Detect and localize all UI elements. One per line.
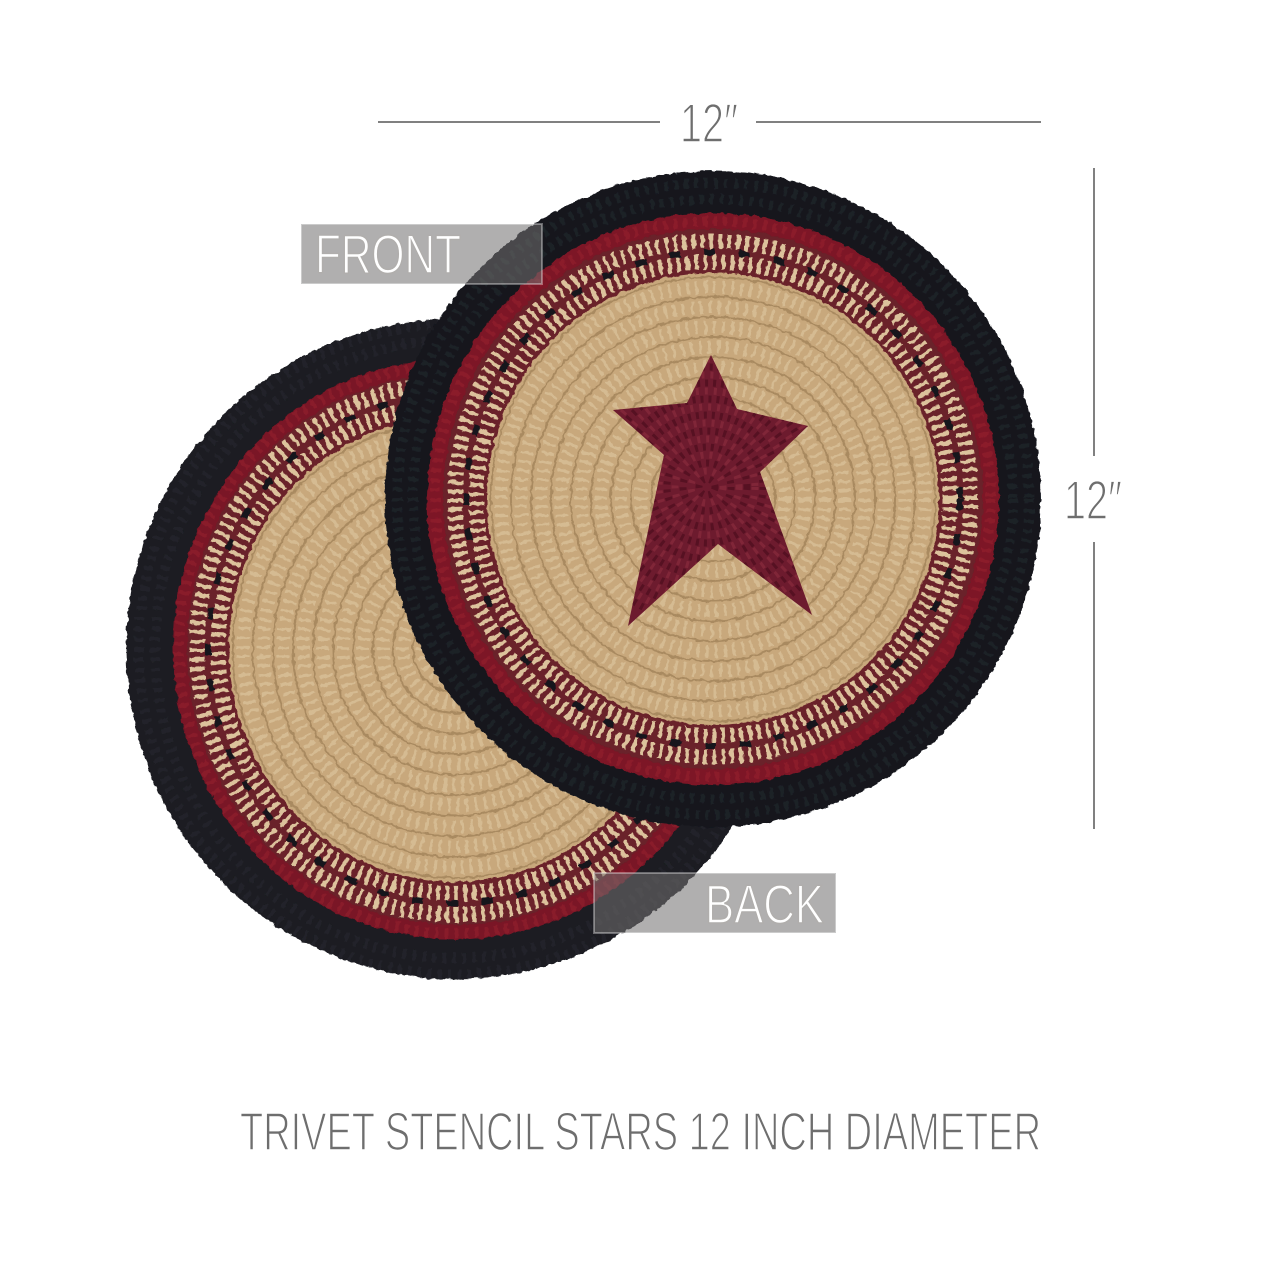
back trivet	[126, 319, 784, 979]
icon: maroon primitive star	[613, 355, 812, 626]
woven rings	[385, 171, 1041, 827]
dimension: right height 12 inch: 12″	[1064, 469, 1122, 531]
front trivet	[385, 171, 1041, 827]
dimension: top width 12 inch: 12″	[680, 92, 738, 154]
label: back: BACK	[705, 873, 824, 935]
label: front: FRONT	[315, 223, 461, 285]
label: back	[594, 873, 836, 935]
